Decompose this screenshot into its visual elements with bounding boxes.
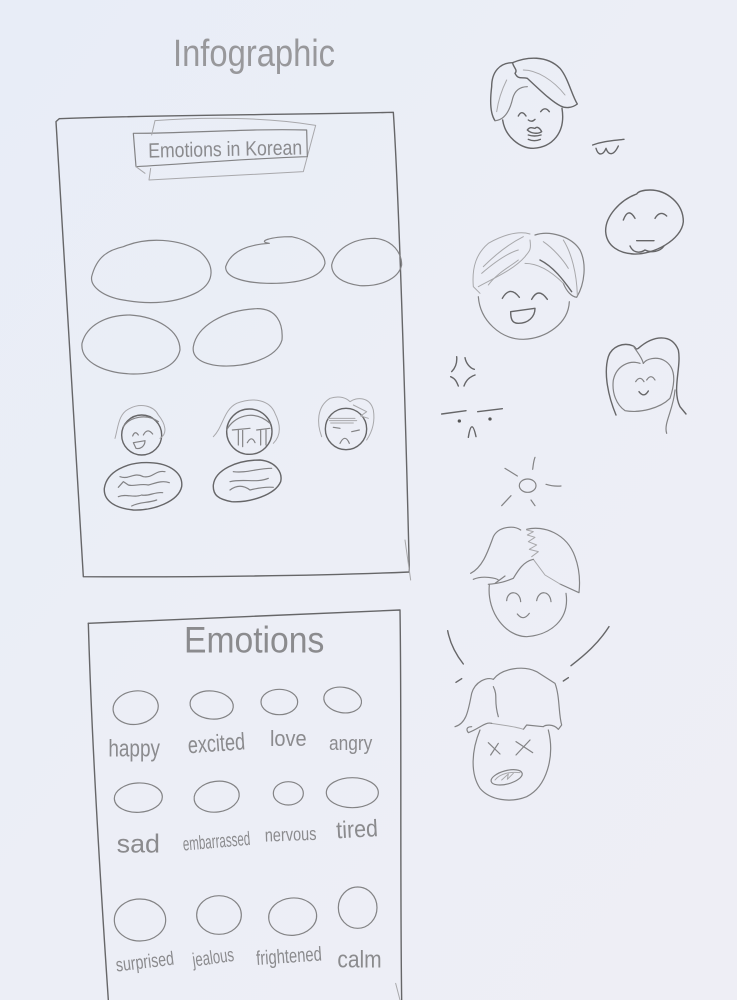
icon: crying character xyxy=(213,400,279,454)
emotion: sad xyxy=(114,782,163,859)
emotion: happy: happy xyxy=(108,736,160,763)
emotion: nervous: nervous xyxy=(264,823,317,846)
emotion: tired xyxy=(326,778,379,844)
bubble: second row right xyxy=(193,309,282,366)
emotion: surprised xyxy=(114,899,175,977)
emotion: tired: tired xyxy=(336,815,379,844)
heading: Emotions: Emotions xyxy=(184,619,324,661)
bubble: first row right xyxy=(332,238,402,286)
icon: kissing face with hair xyxy=(491,58,577,148)
emotion: calm: calm xyxy=(337,946,382,973)
emotion: angry xyxy=(322,684,373,755)
emotion: love: love xyxy=(270,726,307,751)
emotion: frightened: frightened xyxy=(255,943,323,970)
banner: Emotions in Korean: Emotions in Korean xyxy=(148,136,302,163)
banner: Emotions in Korean xyxy=(133,118,316,180)
bubble: first row centre xyxy=(226,237,325,283)
emotion: embarrassed: embarrassed xyxy=(182,829,251,856)
bubble: first row left xyxy=(92,240,211,303)
icon: happy character xyxy=(115,406,165,455)
panel: character examples xyxy=(104,397,374,510)
emotion: jealous: jealous xyxy=(190,945,235,972)
emotion: calm xyxy=(337,887,382,973)
emotion: surprised: surprised xyxy=(115,949,175,977)
icon: angry expression xyxy=(442,409,502,437)
panel: lower character studies xyxy=(448,457,609,800)
emotion: angry: angry xyxy=(329,732,373,755)
icon: pouting mouth mark xyxy=(593,139,624,154)
panel: emotions list xyxy=(88,610,402,1000)
emotion: happy xyxy=(108,688,160,763)
icon: surprise lines xyxy=(448,627,609,682)
emotion: excited xyxy=(187,689,246,759)
icon: sun xyxy=(502,457,561,506)
emotion: excited: excited xyxy=(187,728,246,759)
title: Infographic: Infographic xyxy=(173,33,335,75)
emotion: love xyxy=(261,689,307,751)
emotion: nervous xyxy=(264,782,317,846)
icon: bald smiling face xyxy=(606,190,683,254)
emotion: jealous xyxy=(190,896,241,972)
bubble: second row left xyxy=(82,315,180,374)
icon: dazed face with crossed eyes xyxy=(455,668,562,800)
icon: anger mark xyxy=(451,357,475,386)
icon: long hair smiling face xyxy=(606,338,686,433)
emotion: frightened xyxy=(255,896,323,970)
icon: laughing face with hair xyxy=(473,233,584,339)
text bubble: crying description xyxy=(213,460,281,502)
emotion: embarrassed xyxy=(182,778,251,856)
emotion: sad: sad xyxy=(117,829,160,859)
icon: calm smiling face xyxy=(471,527,580,637)
icon: annoyed character xyxy=(319,397,374,450)
panel: character drawing studies xyxy=(442,58,686,437)
panel: infographic layout frame xyxy=(56,112,411,580)
text bubble: happy description xyxy=(104,463,182,510)
